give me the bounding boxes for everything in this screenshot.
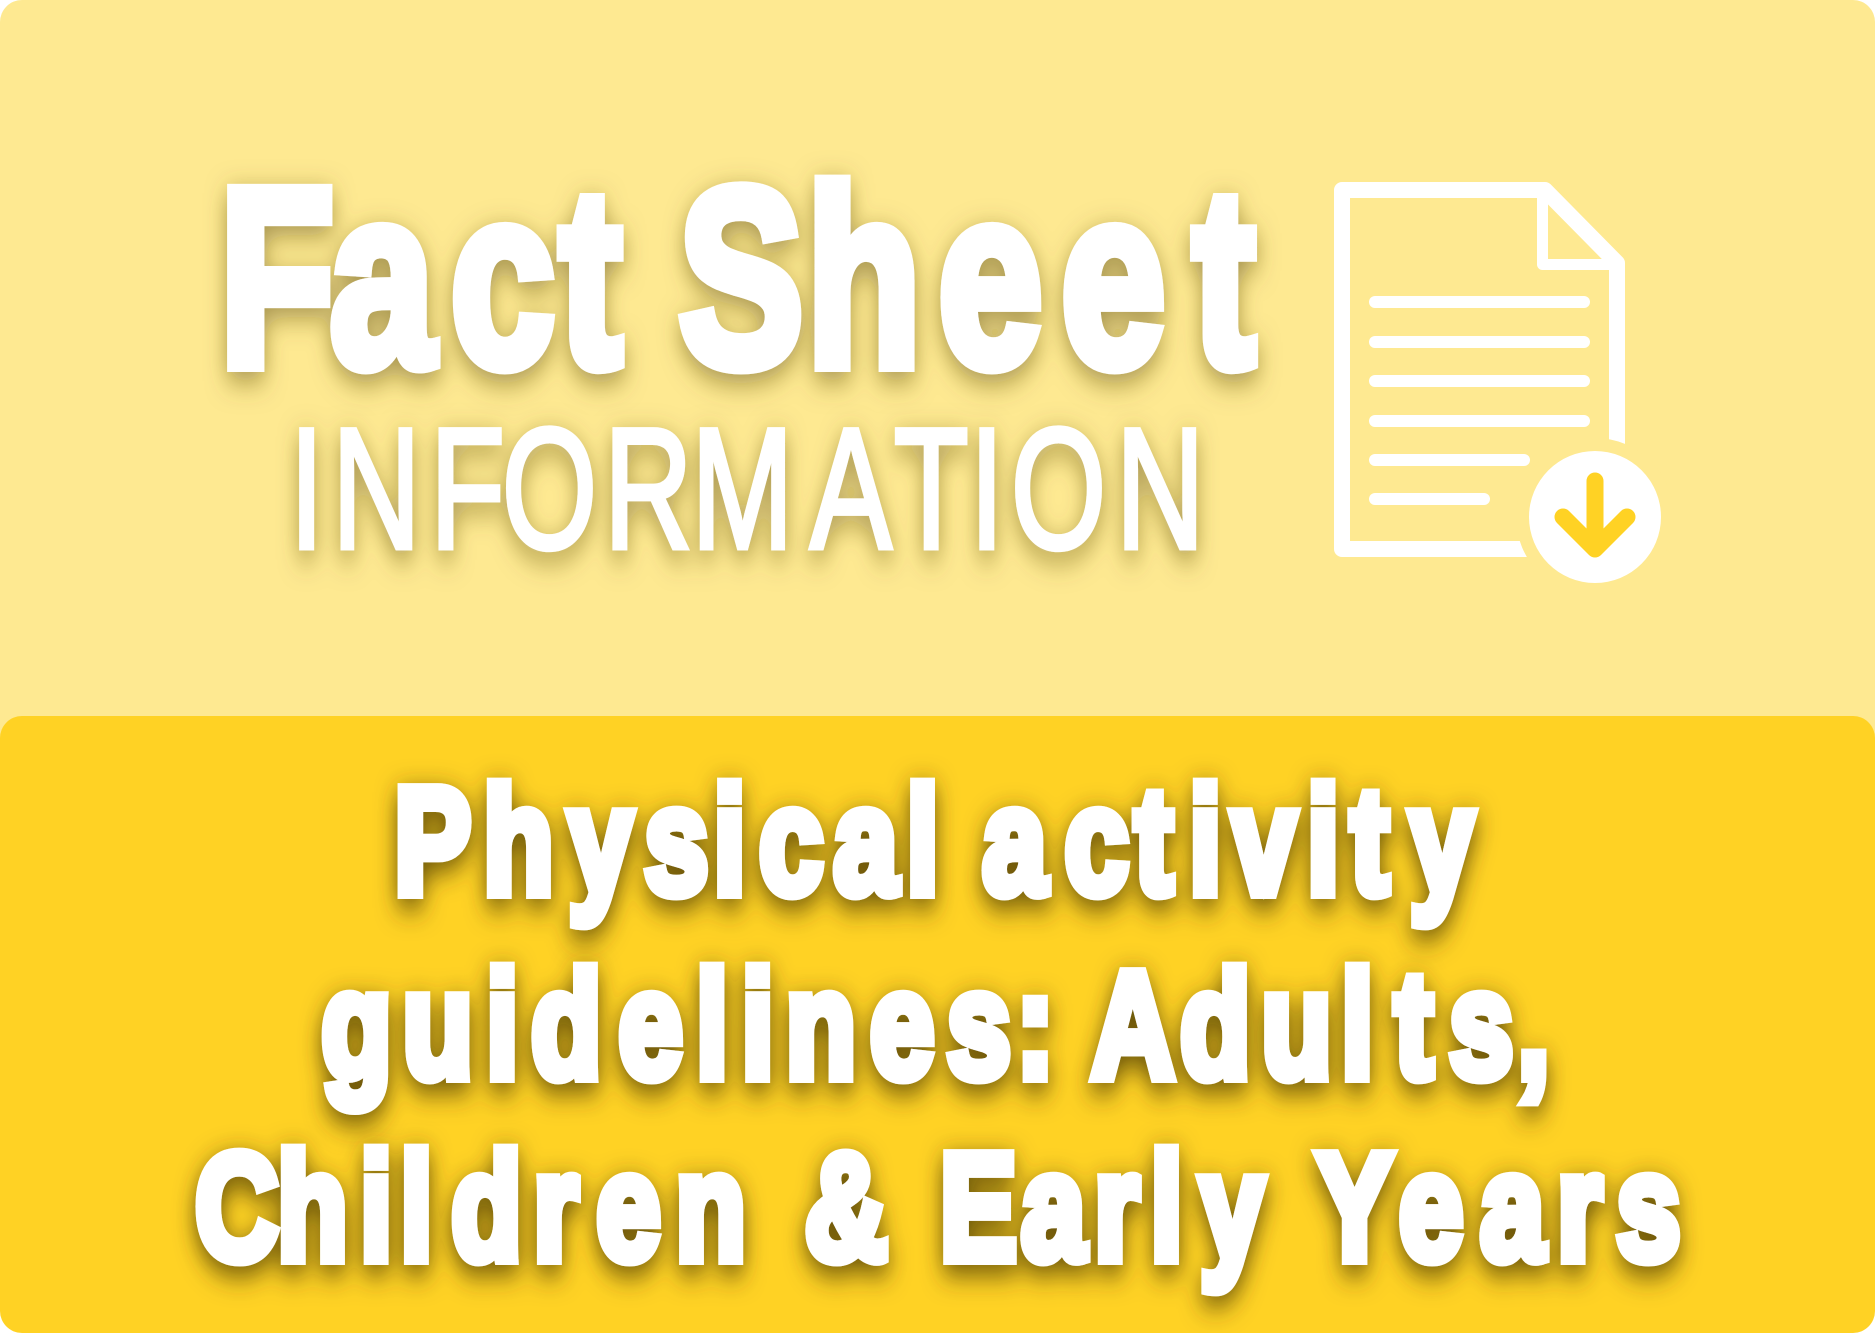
title line 3: Children & Early Years [195,1124,1680,1292]
subheading: INFORMATION: INFORMATION [290,392,1204,585]
panel: top header background [0,0,1875,780]
title line 2: guidelines: Adults, [321,942,1550,1110]
badge cut-out ring [1516,438,1674,596]
document text lines [1375,302,1584,499]
document folded corner [1542,190,1617,264]
download arrow [1563,481,1627,549]
document outline [1342,190,1617,549]
panel: bottom title background [0,716,1875,1333]
download badge circle [1529,451,1661,583]
heading: Fact Sheet: Fact Sheet [220,138,1255,420]
icon: document with download arrow [1342,190,1674,596]
title line 1: Physical activity [394,758,1474,926]
